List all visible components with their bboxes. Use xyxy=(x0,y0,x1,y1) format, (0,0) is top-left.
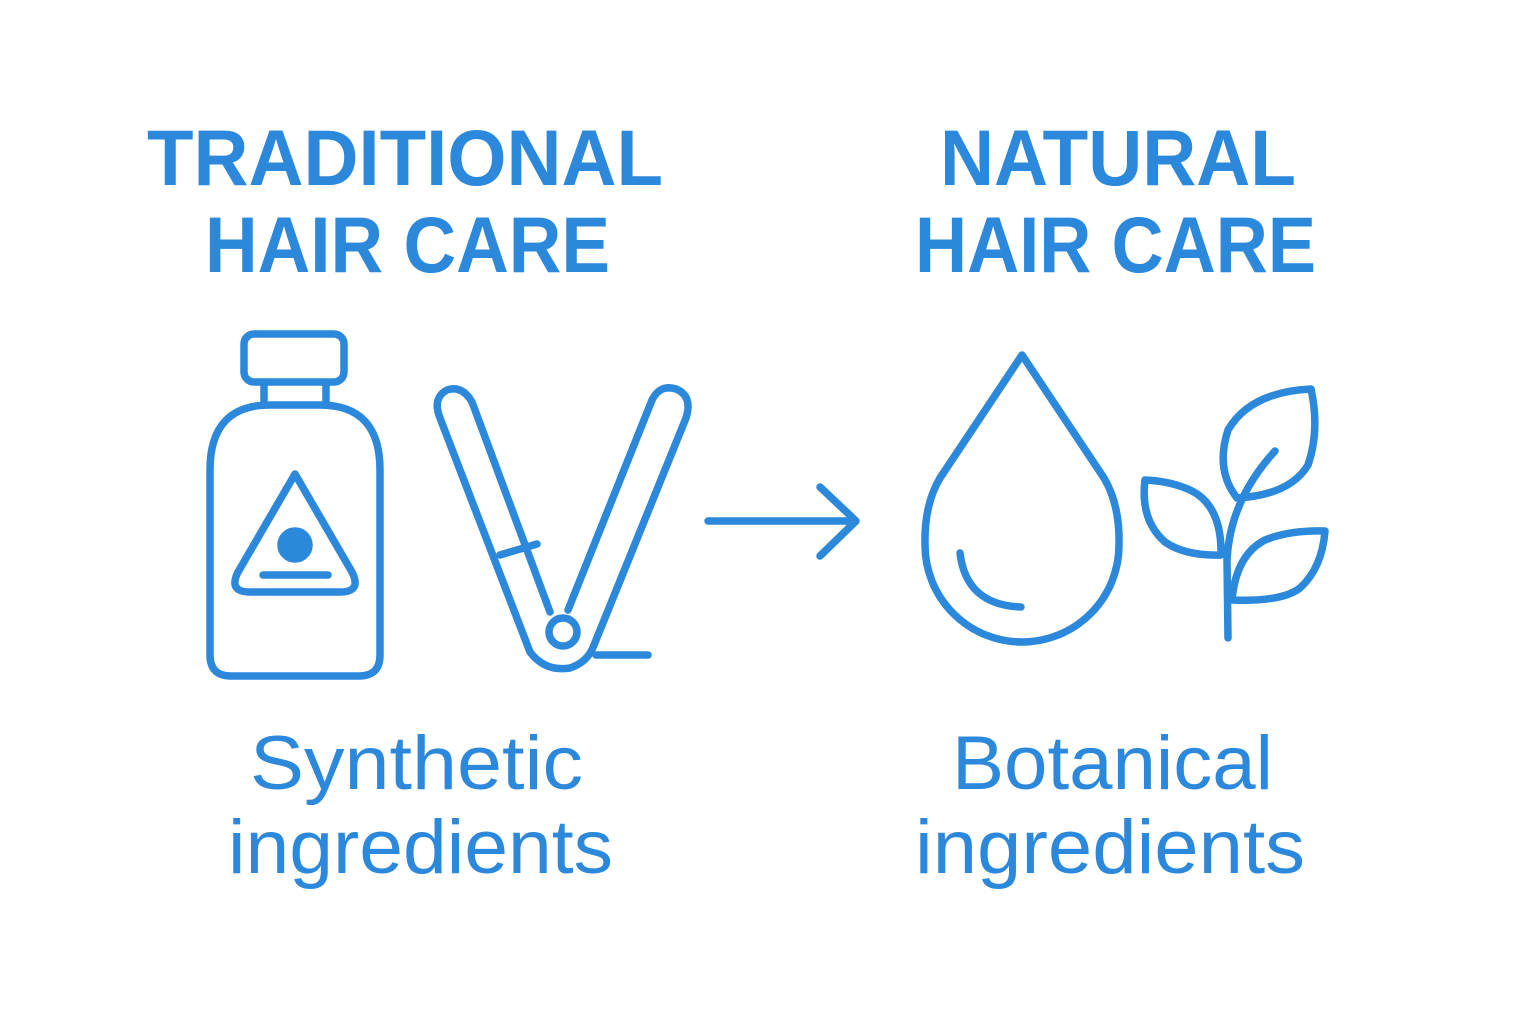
label: synthetic ingredients: Synthetic xyxy=(250,721,583,806)
icon: plant xyxy=(1144,389,1325,638)
title: natural hair care: NATURAL xyxy=(940,113,1296,202)
label: botanical ingredients xyxy=(915,721,1305,890)
arrow xyxy=(708,487,856,556)
title: traditional hair care: HAIR CARE xyxy=(205,200,610,289)
icon: flat iron xyxy=(437,388,688,669)
icon: shampoo bottle xyxy=(210,334,380,676)
icon: water drop xyxy=(925,355,1119,642)
label: botanical ingredients: Botanical xyxy=(952,721,1273,806)
label: synthetic ingredients: ingredients xyxy=(228,805,613,890)
title: traditional hair care xyxy=(147,113,663,289)
label: synthetic ingredients xyxy=(228,721,613,890)
title: natural hair care xyxy=(915,113,1316,289)
label: botanical ingredients: ingredients xyxy=(915,805,1305,890)
title: traditional hair care: TRADITIONAL xyxy=(147,113,663,202)
title: natural hair care: HAIR CARE xyxy=(915,200,1316,289)
